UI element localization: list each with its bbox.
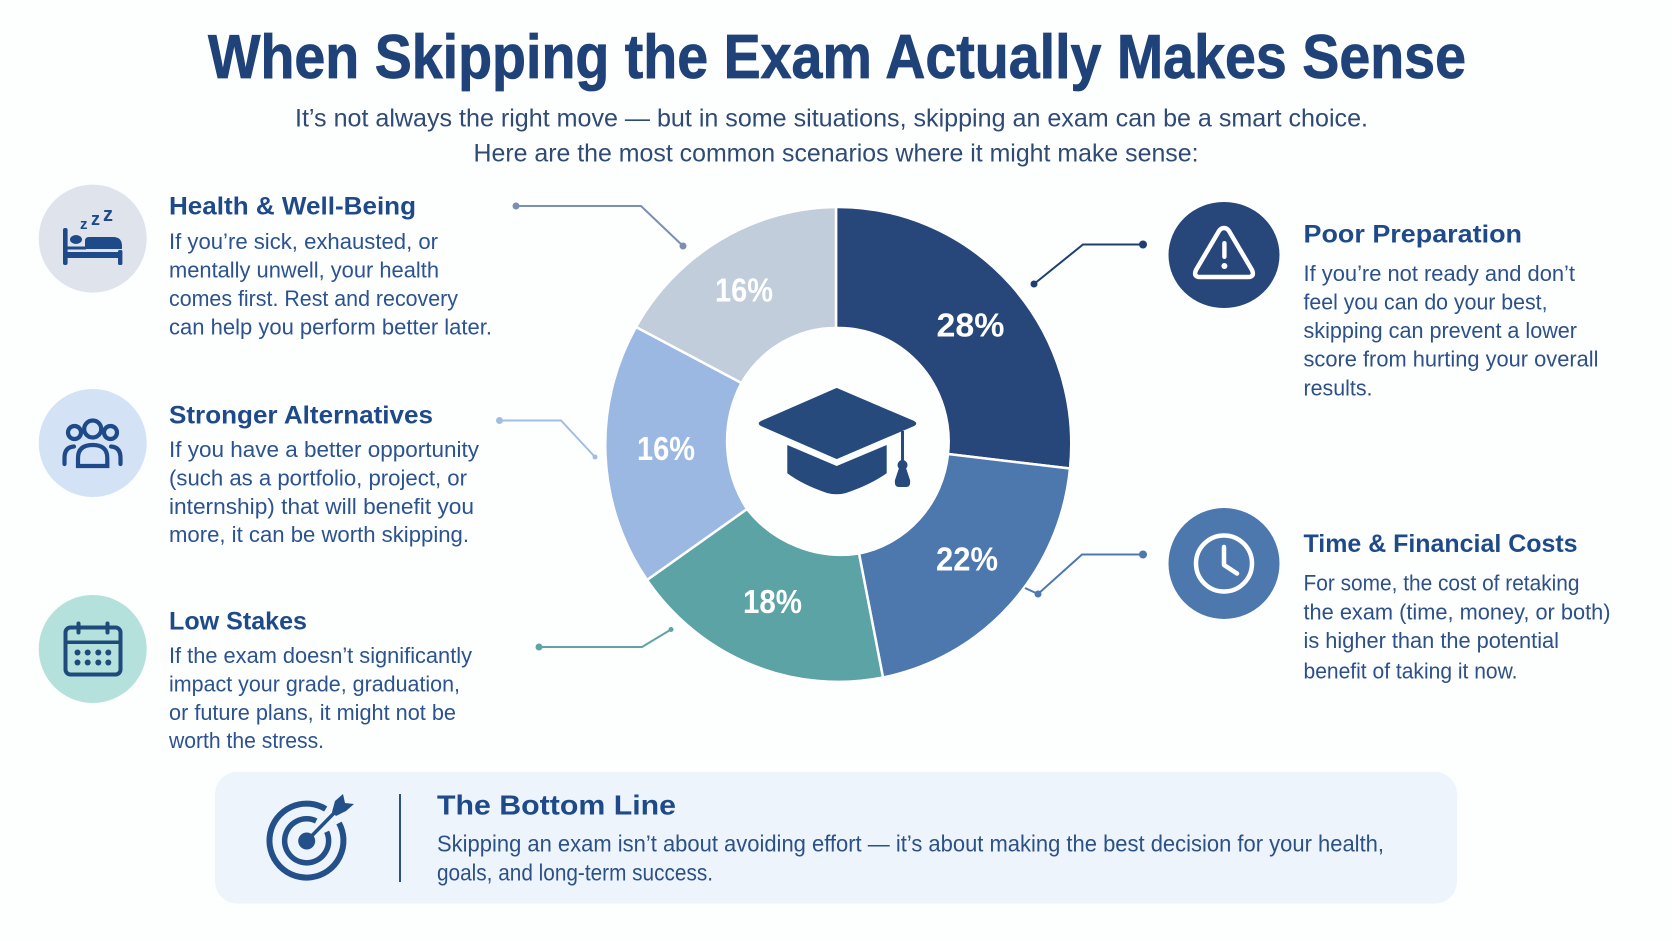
text: low stakes: worth the stress. [168,728,324,753]
text: time and financial costs: For some, the cost of retaking [1304,570,1580,596]
subtitle: It’s not always the right move — but in some situations, skipping an exam can be a smart choice. [295,104,1368,132]
heading: the bottom line: The Bottom Line [437,790,676,820]
segment: 16 percent grey [636,207,836,383]
text: poor preparation: results. [1304,376,1372,400]
segment: 18 percent [647,509,883,682]
label: 16 percent blue: 16% [637,430,695,467]
segment: 22 percent [859,454,1070,678]
connector: stronger alternatives [496,417,598,460]
divider line [399,794,401,882]
label: 16 percent grey: 16% [715,272,773,308]
icon: sleeping in bed: z [103,204,113,226]
text: poor preparation [1304,261,1598,400]
heading: health and well-being: Health & Well-Being [169,192,416,220]
text: low stakes: impact your grade, graduation, [169,672,460,696]
label: 18 percent: 18% [743,583,802,620]
segment: 16 percent blue [605,327,747,580]
text: poor preparation: feel you can do your best, [1304,290,1548,314]
subtitle: Here are the most common scenarios where it might make sense: [474,140,1198,168]
icon: group of people [39,389,147,497]
text: stronger alternatives: If you have a better opportunity [169,437,479,462]
text: stronger alternatives: more, it can be worth skipping. [169,522,469,547]
panel: the bottom line [215,772,1457,904]
heading: poor preparation: Poor Preparation [1304,220,1522,248]
text: poor preparation: score from hurting your overall [1304,346,1598,372]
icon: clock [1168,508,1280,619]
title: When Skipping the Exam Actually Makes Sense [208,23,1466,92]
heading: stronger alternatives: Stronger Alternatives [169,402,433,430]
segment: 28 percent [836,207,1071,468]
panel: time and financial costs [1168,508,1610,684]
text: time and financial costs: benefit of taking it now. [1304,658,1518,684]
text: health and well-being: can help you perform better later. [169,314,492,340]
text: low stakes: If the exam doesn’t significantly [169,643,472,668]
text: the bottom line [437,830,1384,886]
text: health and well-being: mentally unwell, your health [169,258,439,282]
icon: graduation cap [759,388,916,494]
text: low stakes: or future plans, it might not be [169,700,456,725]
text: stronger alternatives [169,437,479,547]
connector: health and well-being [512,202,686,250]
text: stronger alternatives: (such as a portfolio, project, or [169,466,467,490]
text: health and well-being: comes first. Rest and recovery [169,286,458,311]
panel: low stakes [39,595,472,753]
text: health and well-being [169,229,492,340]
icon: sleeping in bed [39,185,147,293]
panel: health and well-being [39,185,492,340]
icon: calendar [39,595,147,703]
icon: target with arrow [269,794,354,878]
icon: warning triangle [1168,202,1280,308]
subtitle [295,104,1368,168]
connector: poor preparation [1030,240,1147,288]
text: the bottom line: Skipping an exam isn’t about avoiding effort — it’s about making the best decision for your health, [437,830,1384,856]
icon: sleeping in bed: z [91,209,100,229]
connector: low stakes [536,627,674,650]
label: 22 percent: 22% [936,540,998,578]
heading: time and financial costs: Time & Financial Costs [1304,530,1578,558]
heading: low stakes: Low Stakes [169,608,307,636]
panel: poor preparation [1168,202,1598,400]
text: stronger alternatives: internship) that will benefit you [169,494,474,519]
label: 28 percent: 28% [936,306,1004,344]
panel: stronger alternatives [39,389,479,547]
text: poor preparation: skipping can prevent a lower [1304,318,1577,343]
text: time and financial costs: the exam (time, money, or both) [1304,600,1610,624]
text: health and well-being: If you’re sick, exhausted, or [169,229,438,254]
icon: sleeping in bed: z [80,216,88,233]
text: time and financial costs [1304,570,1610,684]
text: the bottom line: goals, and long-term success. [437,860,713,886]
text: time and financial costs: is higher than the potential [1304,628,1559,653]
connector: time and financial costs [1025,550,1147,598]
donut chart [605,207,1071,682]
text: low stakes [168,643,472,753]
text: poor preparation: If you’re not ready and don’t [1304,261,1575,286]
